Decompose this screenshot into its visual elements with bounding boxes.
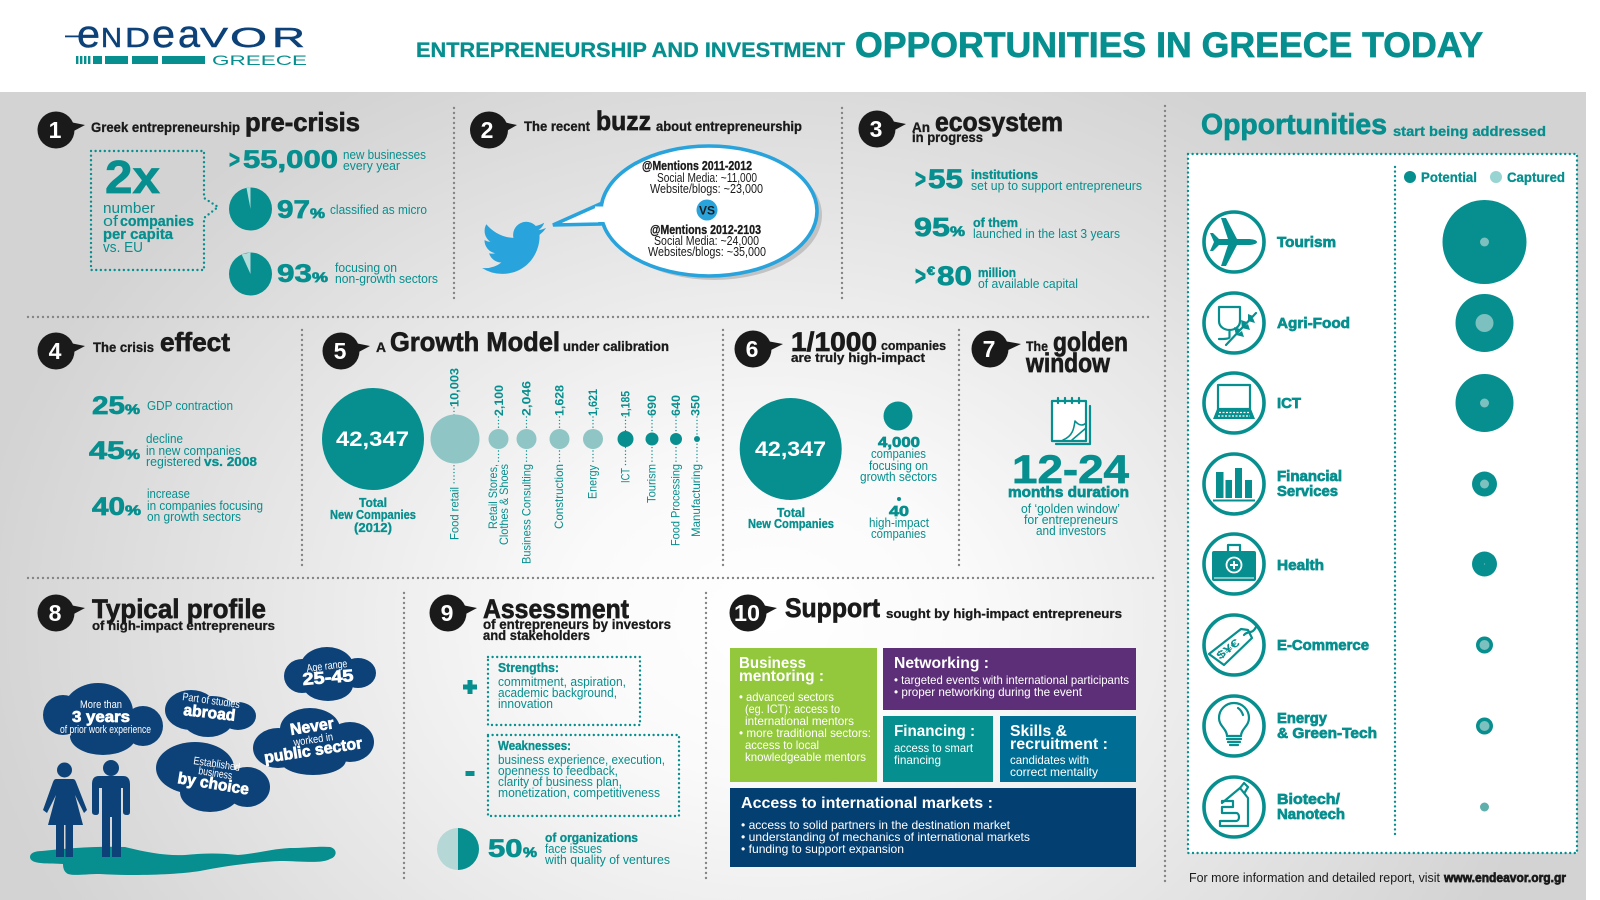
panel 3: ecosystem (858, 107, 1142, 291)
heading 9 (483, 594, 671, 643)
row: agri-food: Agri-Food (1277, 316, 1350, 332)
stat: 93% non-growth with pie (229, 252, 438, 296)
sector bubble chart: Manufacturing (689, 464, 703, 537)
row: financial services (1204, 454, 1497, 514)
stat: 80 million capital: 80 (937, 261, 972, 291)
cloud: 3 years (43, 683, 163, 755)
logo: Endeavor Greece: R (272, 22, 305, 53)
cloud: age range: 25-45 (302, 666, 354, 689)
heading 6 (791, 327, 946, 365)
cloud: age range (284, 647, 376, 701)
row: tourism (1204, 200, 1526, 284)
sector bubble chart: 1,621 (586, 389, 600, 416)
sector bubble chart: 690 (645, 395, 659, 416)
speech bubble: @Mentions 2012-2103 (650, 223, 761, 237)
weaknesses: Weaknesses: (498, 739, 571, 753)
stat: 45% decline (89, 432, 257, 469)
callout: 2x per capita (91, 151, 218, 270)
stat: 50% organizations with pie (437, 828, 670, 870)
sector bubble chart: Energy (586, 465, 600, 499)
callout: 2x per capita: vs. EU (103, 239, 143, 256)
speech bubble: Websites/blogs: ~35,000 (648, 245, 766, 259)
speech bubble (553, 146, 822, 280)
panel 2: buzz (470, 106, 822, 280)
sector bubble chart: 1,628 (552, 385, 566, 416)
box: business mentoring: international mentors (745, 714, 854, 728)
badge 2 (470, 112, 517, 148)
icon: laptop (1204, 373, 1264, 433)
cloud: by choice (156, 742, 270, 812)
stat: 55 institutions (915, 164, 1142, 194)
row: energy (1204, 696, 1493, 756)
stat: 93% non-growth with pie: % (312, 269, 329, 285)
heading 9: of entrepreneurs by investors (483, 617, 671, 632)
heading 7: golden (1053, 327, 1128, 357)
stat: 40% increase (92, 487, 263, 524)
box: financing: financing (894, 753, 941, 767)
heading 10: Support (785, 593, 880, 623)
box: business mentoring: knowledgeable mentors (745, 750, 866, 764)
total new companies circle: 42,347 (336, 428, 409, 451)
heading 2: buzz (596, 106, 651, 136)
vs marker: VS (699, 204, 715, 218)
box: skills and recruitment: correct mentality (1010, 765, 1098, 779)
row: ict (1204, 373, 1514, 433)
logo: Endeavor Greece: N (101, 22, 122, 53)
strengths: academic background, (498, 686, 617, 700)
logo: Endeavor Greece (65, 14, 307, 68)
4,000 companies: focusing on (869, 459, 928, 473)
40 high-impact companies: companies (871, 527, 926, 541)
cloud: never public sector: public sector (263, 735, 363, 767)
heading 10 (785, 593, 1122, 623)
footer: For more information and detailed report, visit (1189, 871, 1441, 885)
badge 7: 7 (983, 336, 995, 362)
heading 6: are truly high-impact (791, 350, 926, 365)
stat: 50% organizations with pie: with quality of ventures (544, 853, 670, 867)
box: networking: Networking : (894, 655, 989, 672)
weaknesses: monetization, competitiveness (498, 786, 660, 800)
badge 5 (322, 332, 370, 370)
icon: glass and wheat (1204, 293, 1264, 353)
stat: 80 million capital: > (915, 261, 926, 291)
icon: medical case (1204, 534, 1264, 594)
sector bubble chart: Retail Stores, (486, 464, 500, 529)
stat: 80 million capital: € (927, 264, 935, 278)
cloud: never public sector: worked in (292, 731, 334, 749)
box: business mentoring: • more traditional sectors: (739, 726, 871, 740)
box: skills and recruitment (1000, 716, 1136, 782)
stat: 50% organizations with pie: face issues (545, 842, 602, 856)
badge 9: 9 (441, 600, 453, 626)
heading 2: The recent (524, 119, 590, 134)
stat: 25% GDP: 25 (92, 392, 125, 420)
row: energy: & Green-Tech (1277, 726, 1377, 742)
stat: 55,000 new businesses (229, 146, 426, 174)
stat: 95% launched (914, 212, 1120, 242)
stat: 40% increase: on growth sectors (147, 510, 241, 524)
weaknesses (466, 735, 679, 816)
row: biotech: Nanotech (1277, 807, 1345, 823)
panel 4: crisis effect (38, 327, 263, 524)
badge 8 (38, 594, 85, 632)
heading 5: under calibration (563, 339, 669, 354)
sector bubble chart: 350 (688, 395, 702, 416)
box: business mentoring (730, 648, 877, 782)
stat: 97% micro with pie: % (310, 205, 326, 221)
stat: 95% launched: % (950, 223, 966, 239)
speech bubble: Social Media: ~11,000 (657, 171, 757, 185)
stat: 80 million capital (915, 261, 1078, 291)
heading 3: in progress (912, 130, 983, 145)
stat: 45% decline: % (125, 446, 141, 462)
heading 7: The (1026, 338, 1048, 354)
heading 1: Greek entrepreneurship (91, 120, 240, 135)
section dividers (28, 106, 1165, 883)
heading 3: An (912, 119, 930, 135)
stat: 12-24 months: and investors (1036, 524, 1106, 538)
column divider (1394, 167, 1396, 838)
heading 4: effect (160, 327, 230, 357)
box: business mentoring: • advanced sectors (739, 690, 834, 704)
figure: man (92, 760, 130, 857)
stat: 97% micro with pie: classified as micro (330, 203, 427, 217)
stat: 40% increase: in companies focusing (147, 499, 263, 513)
heading 1 (91, 107, 360, 137)
badge 4: 4 (49, 338, 62, 364)
box: business mentoring: (eg. ICT): access to (745, 702, 840, 716)
logo: Endeavor Greece: D (125, 22, 150, 53)
stat: 25% GDP: % (125, 401, 141, 417)
cloud: abroad: Part of studies (182, 691, 241, 711)
badge 4 (38, 332, 85, 370)
stat: 93% non-growth with pie: focusing on (335, 261, 397, 275)
cloud: abroad (165, 690, 256, 737)
row: biotech (1204, 777, 1489, 837)
sector bubble chart: Food Processing (668, 464, 682, 546)
box: financing (883, 716, 993, 782)
sector bubble chart: 1,185 (618, 391, 632, 417)
badge 8: 8 (49, 600, 62, 626)
stat: 55 institutions: institutions (971, 168, 1038, 182)
stat: 45% decline: registered (146, 455, 201, 469)
cloud: by choice: by choice (176, 770, 250, 799)
4,000 companies: growth sectors (860, 470, 937, 484)
total new companies circle: Total (359, 496, 387, 510)
stat: 45% decline: decline (146, 432, 183, 446)
title: OPPORTUNITIES IN GREECE TODAY (855, 26, 1483, 65)
box: access to international markets: • understanding of mechanics of international markets (741, 830, 1030, 844)
legend: Potential (1421, 170, 1477, 185)
icon: airplane (1204, 212, 1264, 272)
stat: 25% GDP (92, 392, 233, 420)
badge 6 (734, 330, 783, 368)
heading 2: about entrepreneurship (656, 119, 802, 134)
strengths: Strengths: (498, 661, 559, 675)
4,000 companies: companies (871, 447, 926, 461)
icon: bar chart (1204, 454, 1264, 514)
box: financing: access to smart (894, 741, 974, 755)
row: tourism: Tourism (1277, 235, 1336, 251)
sector bubble chart: Construction (552, 464, 566, 529)
stat: 50% organizations with pie: of organizations (545, 831, 638, 845)
cloud: 3 years: 3 years (72, 709, 130, 726)
stat: 95% launched: 95 (914, 212, 950, 242)
badge 5: 5 (334, 338, 347, 364)
stat: 12-24 months: for entrepreneurs (1024, 513, 1118, 527)
total new companies circle: New Companies (330, 508, 416, 522)
heading 8: Typical profile (92, 594, 266, 624)
box: access to international markets (730, 788, 1136, 867)
40 high-impact companies (869, 497, 929, 541)
badge 3: 3 (870, 116, 882, 142)
stat: 12-24 months (1008, 448, 1130, 538)
callout: 2x per capita: number (103, 200, 155, 217)
sector bubble chart: Business Consulting (520, 464, 534, 564)
stat: 40% increase: % (125, 502, 142, 518)
panel 1: pre-crisis (38, 107, 438, 296)
box: business mentoring: access to local (745, 738, 819, 752)
footer (1189, 871, 1566, 885)
heading 9: Assessment (483, 594, 629, 624)
panel 10: support (730, 593, 1136, 867)
box: networking (883, 648, 1136, 710)
legend (1404, 170, 1565, 185)
white card (1188, 154, 1577, 853)
row: biotech: Biotech/ (1277, 792, 1340, 808)
stat: 45% decline: 45 (89, 437, 125, 465)
logo: Endeavor Greece: O (230, 22, 267, 53)
heading 10: sought by high-impact entrepreneurs (886, 606, 1122, 621)
stat: 93% non-growth with pie: non-growth sectors (335, 272, 438, 286)
heading 5: A (376, 340, 386, 355)
heading 6: companies (881, 338, 946, 353)
heading 8: of high-impact entrepreneurs (92, 618, 275, 633)
box: skills and recruitment: recruitment : (1010, 736, 1108, 753)
speech bubble: @Mentions 2011-2012 (642, 159, 752, 173)
stat: 55 institutions: > (915, 164, 926, 194)
logo: Endeavor Greece: a (178, 14, 201, 56)
strengths: innovation (498, 697, 553, 711)
figure: woman (43, 762, 87, 857)
stat: 95% launched: launched in the last 3 years (973, 227, 1120, 241)
box: access to international markets: Access to international markets : (741, 795, 993, 812)
stat: 55,000 new businesses: every year (343, 159, 400, 173)
box: networking: • targeted events with international participants (894, 673, 1129, 687)
badge 9 (430, 594, 477, 632)
stat: 40% increase: increase (147, 487, 190, 501)
4,000 companies: 4,000 (878, 434, 920, 451)
panel: opportunities (1188, 109, 1577, 853)
heading 4 (93, 327, 230, 357)
badge 10: 10 (734, 600, 760, 626)
callout: 2x per capita: companies (120, 213, 194, 230)
panel 7: golden window (972, 327, 1130, 538)
sector bubble chart: Clothes & Shoes (497, 464, 511, 545)
stat: 80 million capital: million (978, 266, 1016, 280)
heading 7 (1025, 327, 1128, 378)
stat: 55,000 new businesses: 55,000 (243, 146, 338, 174)
icon: price tag: $¥€ (1214, 637, 1242, 662)
stat: 12-24 months: months duration (1008, 484, 1129, 501)
badge 7 (972, 330, 1021, 368)
stat: 97% micro with pie (229, 188, 427, 230)
box: access to international markets: • funding to support expansion (741, 842, 904, 856)
stat: 55,000 new businesses: new businesses (343, 148, 426, 162)
stat: 55 institutions: 55 (928, 164, 963, 194)
heading 3: ecosystem (935, 107, 1063, 137)
sector bubble chart: Food retail (448, 487, 462, 540)
title: ENTREPRENEURSHIP AND INVESTMENT (416, 39, 845, 62)
badge 6: 6 (746, 336, 758, 362)
speech bubble: Social Media: ~24,000 (654, 234, 759, 248)
sector bubble chart: ICT (618, 467, 632, 483)
sector bubble chart: 2,100 (492, 385, 506, 416)
40 high-impact companies: high-impact (869, 516, 929, 530)
cloud: abroad: abroad (183, 702, 236, 725)
row: e-commerce: E-Commerce (1277, 638, 1369, 654)
stat: 50% organizations with pie: % (523, 844, 538, 860)
stat: 40% increase: 40 (92, 493, 125, 521)
badge 2: 2 (481, 117, 493, 143)
stat: 80 million capital: of available capital (978, 277, 1078, 291)
sector bubble chart: 2,046 (520, 381, 534, 416)
heading 9: and stakeholders (483, 628, 590, 643)
row: ict: ICT (1277, 396, 1301, 412)
stat: 95% launched: of them (973, 216, 1018, 230)
icon: calendar (1052, 398, 1090, 444)
icon: microscope (1204, 777, 1264, 837)
callout: 2x per capita: 2x (105, 151, 160, 203)
panel 9: assessment (430, 594, 679, 870)
box: business mentoring: mentoring : (739, 668, 824, 685)
sector bubble chart (430, 368, 703, 564)
cloud: by choice: Established (193, 755, 241, 774)
box: skills and recruitment: Skills & (1010, 723, 1067, 740)
badge 1: 1 (49, 117, 62, 143)
stat: 50% organizations with pie: 50 (488, 835, 522, 863)
cloud: never public sector: Never (289, 715, 335, 739)
badge 1 (38, 112, 85, 148)
logo: Endeavor Greece: e (152, 14, 175, 56)
callout: 2x per capita: of (103, 213, 119, 230)
cloud: age range: Age range (306, 658, 348, 675)
cloud: never public sector (253, 708, 374, 775)
heading 7: window (1025, 348, 1111, 378)
strengths (463, 657, 640, 725)
logo: Endeavor Greece: GREECE (212, 52, 307, 68)
stat: 12-24 months: of ‘golden window’ (1021, 502, 1120, 516)
box: skills and recruitment: candidates with (1010, 753, 1089, 767)
badge 10 (730, 594, 777, 632)
heading 1: pre-crisis (245, 107, 360, 137)
icon: price tag (1204, 615, 1264, 675)
logo: Endeavor Greece: V (200, 22, 228, 53)
panel 5: growth model (322, 327, 703, 564)
heading 3 (912, 107, 1063, 145)
heading 6: 1/1000 (791, 327, 877, 357)
cloud: by choice: business (198, 765, 233, 782)
opportunities heading: Opportunities (1201, 109, 1387, 141)
cloud: 3 years: of prior work experience (60, 724, 151, 736)
4,000 companies (860, 402, 937, 484)
weaknesses: clarity of business plan, (498, 775, 622, 789)
heading 2 (524, 106, 802, 136)
total circle (740, 398, 842, 531)
panel 6: high-impact (734, 327, 946, 541)
callout: 2x per capita: per capita (103, 226, 174, 243)
stat: 97% micro with pie: 97 (277, 196, 310, 224)
row: e-commerce (1204, 615, 1493, 675)
speech bubble: Website/blogs: ~23,000 (650, 182, 763, 196)
heading 4: The crisis (93, 340, 154, 355)
box: networking: • proper networking during the event (894, 685, 1083, 699)
stat: 45% decline: vs. 2008 (204, 455, 257, 469)
weaknesses: openness to feedback, (498, 764, 618, 778)
weaknesses: business experience, execution, (498, 753, 665, 767)
box: access to international markets: • access to solid partners in the destination market (741, 818, 1011, 832)
stat: 12-24 months: 12-24 (1012, 448, 1130, 492)
opportunities heading (1201, 109, 1546, 141)
stat: 55,000 new businesses: > (229, 146, 240, 174)
ground (30, 847, 336, 875)
total circle: Total (777, 506, 805, 520)
row: health (1204, 534, 1497, 594)
row: financial services: Financial (1277, 469, 1342, 485)
stat: 55 institutions: set up to support entrepreneurs (971, 179, 1142, 193)
total circle: New Companies (748, 517, 834, 531)
footer: www.endeavor.org.gr (1443, 871, 1566, 885)
box: financing: Financing : (894, 723, 975, 740)
legend: Captured (1507, 170, 1565, 185)
box: business mentoring: Business (739, 655, 806, 672)
icon: twitter bird (482, 222, 546, 274)
stat: 45% decline: in new companies (146, 444, 241, 458)
opportunities heading: start being addressed (1393, 123, 1546, 139)
row: health: Health (1277, 558, 1324, 574)
40 high-impact companies: 40 (889, 503, 909, 520)
sector bubble chart: 10,003 (448, 368, 462, 407)
vs marker (696, 200, 718, 220)
sector bubble chart: Tourism (644, 464, 658, 503)
row: financial services: Services (1277, 484, 1338, 500)
panel 8: typical profile (30, 594, 376, 875)
sector bubble chart: 640 (669, 395, 683, 416)
cloud: 3 years: More than (80, 699, 122, 711)
logo: Endeavor Greece: e (77, 14, 100, 56)
row: energy: Energy (1277, 711, 1327, 727)
row: agri-food (1204, 293, 1514, 353)
icon: light bulb (1204, 696, 1264, 756)
total new companies circle (322, 388, 424, 535)
dotted card border (1188, 154, 1577, 853)
total circle: 42,347 (755, 438, 826, 461)
strengths: commitment, aspiration, (498, 675, 626, 689)
total new companies circle: (2012) (354, 521, 392, 535)
heading 5 (376, 327, 669, 357)
title (416, 26, 1483, 65)
heading 5: Growth Model (390, 327, 560, 357)
badge 3 (858, 110, 906, 148)
stat: 25% GDP: GDP contraction (147, 399, 233, 413)
stat: 93% non-growth with pie: 93 (277, 260, 312, 288)
